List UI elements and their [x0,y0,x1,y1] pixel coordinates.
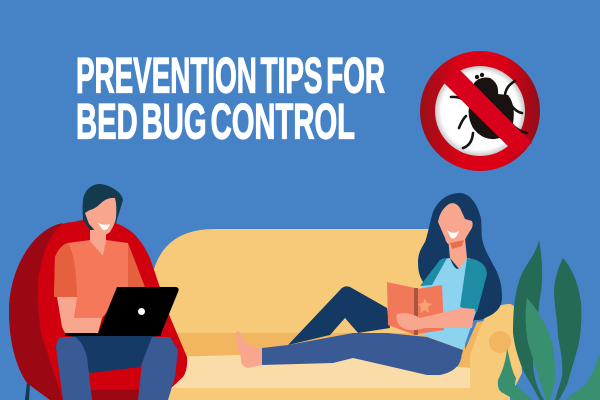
laptop [65,287,179,336]
man in chair [9,184,187,400]
icon: prohibition slash [443,68,532,155]
chair [9,219,187,400]
icon: no bed bug sign [420,51,540,171]
sofa [150,229,522,400]
hair [418,193,502,322]
right thigh [138,337,178,400]
face [438,203,473,245]
title: BED BUG CONTROL [76,94,355,150]
neck [448,238,467,270]
shirt [54,240,128,318]
foot [236,331,262,368]
sofa arm [470,304,522,400]
book [387,282,444,335]
icon: bug [451,73,527,148]
neck [90,230,106,256]
plant [498,240,600,400]
face [85,198,116,235]
title [76,48,385,150]
arm [57,297,102,333]
lap [70,335,156,373]
hair [83,184,123,230]
top [422,258,480,350]
raised leg [288,286,390,345]
chair leg [25,382,30,400]
left thigh [56,337,92,400]
arm [396,308,475,330]
woman [236,193,502,375]
straight leg [262,333,463,375]
